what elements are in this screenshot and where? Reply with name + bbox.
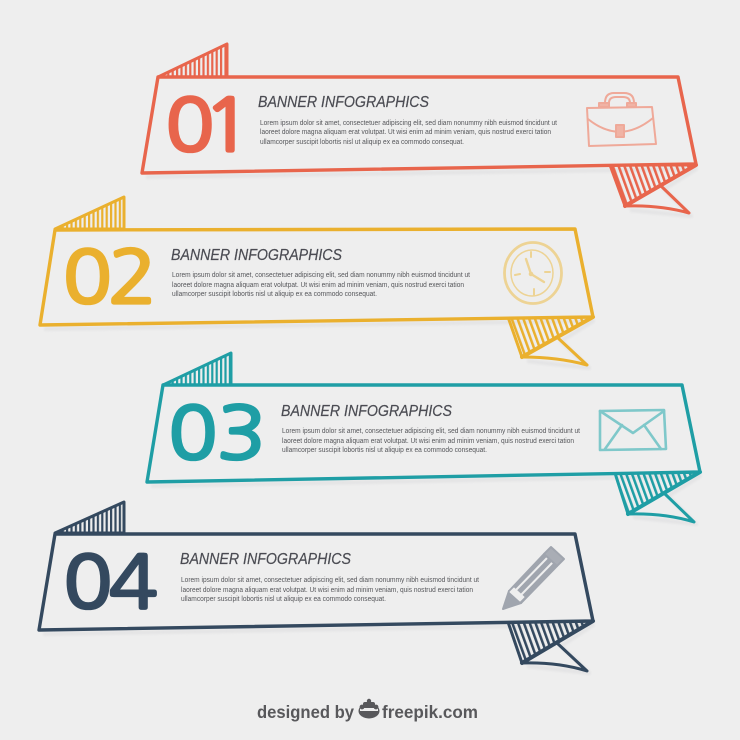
icon: pencil [503, 547, 564, 609]
bottom fold 02 [508, 317, 593, 365]
banner outline 04 [39, 534, 593, 630]
body text 03 [282, 428, 580, 454]
bottom fold 01 [610, 165, 696, 213]
panel: banner 03 [147, 353, 700, 524]
heading 02: BANNER INFOGRAPHICS [171, 247, 343, 264]
body text 04: Lorem ipsum dolor sit amet, consectetuer adipiscing elit, sed diam nonummy nibh euismod tincidunt ut [181, 577, 479, 584]
number 01: 01 [166, 91, 252, 162]
number 03: 03 [168, 399, 266, 470]
heading 01: BANNER INFOGRAPHICS [258, 94, 430, 111]
credit text right: freepik.com [382, 702, 478, 722]
icon: clock [504, 242, 562, 304]
icon: briefcase [587, 93, 656, 146]
top fold 03 [163, 353, 231, 385]
top fold 02 [55, 197, 124, 229]
panel: banner 02 [40, 197, 593, 368]
footer credit [257, 699, 478, 722]
body text 03: laoreet dolore magna aliquam erat volutpat. Ut wisi enim ad minim veniam, quis nostrud exerci tation [282, 438, 574, 445]
top fold 04 [55, 502, 124, 533]
body text 01 [260, 120, 557, 146]
body text 01: ullamcorper suscipit lobortis nisl ut aliquip ex ea commodo consequat. [260, 139, 464, 146]
icon: freepik logo [358, 699, 380, 718]
body text 03: ullamcorper suscipit lobortis nisl ut aliquip ex ea commodo consequat. [282, 447, 487, 454]
body text 02: Lorem ipsum dolor sit amet, consectetuer adipiscing elit, sed diam nonummy nibh euismod tincidunt ut [172, 272, 470, 279]
banner outline 02 [40, 229, 593, 325]
panel: banner 01 [142, 44, 696, 216]
body text 03: Lorem ipsum dolor sit amet, consectetuer adipiscing elit, sed diam nonummy nibh euismod tincidunt ut [282, 428, 580, 435]
icon: envelope [600, 410, 666, 450]
heading 03: BANNER INFOGRAPHICS [281, 403, 453, 420]
body text 04 [181, 577, 479, 603]
number 02: 02 [63, 243, 157, 314]
panel: banner 04 [39, 502, 593, 673]
body text 01: Lorem ipsum dolor sit amet, consectetuer adipiscing elit, sed diam nonummy nibh euismod tincidunt ut [260, 120, 557, 127]
credit text left: designed by [257, 702, 354, 722]
body text 04: laoreet dolore magna aliquam erat volutpat. Ut wisi enim ad minim veniam, quis nostrud exerci tation [181, 587, 473, 594]
bottom fold 03 [615, 472, 700, 522]
body text 04: ullamcorper suscipit lobortis nisl ut aliquip ex ea commodo consequat. [181, 596, 386, 603]
banner outline 03 [147, 385, 700, 482]
body text 01: laoreet dolore magna aliquam erat volutpat. Ut wisi enim ad minim veniam, quis nostrud exerci tation [260, 129, 551, 136]
body text 02: ullamcorper suscipit lobortis nisl ut aliquip ex ea commodo consequat. [172, 291, 377, 298]
banner outline 01 [142, 77, 696, 173]
bottom fold 04 [508, 621, 593, 671]
top fold 01 [158, 44, 227, 77]
body text 02: laoreet dolore magna aliquam erat volutpat. Ut wisi enim ad minim veniam, quis nostrud exerci tation [172, 282, 464, 289]
heading 04: BANNER INFOGRAPHICS [180, 551, 352, 568]
body text 02 [172, 272, 470, 298]
number 04: 04 [64, 548, 158, 619]
